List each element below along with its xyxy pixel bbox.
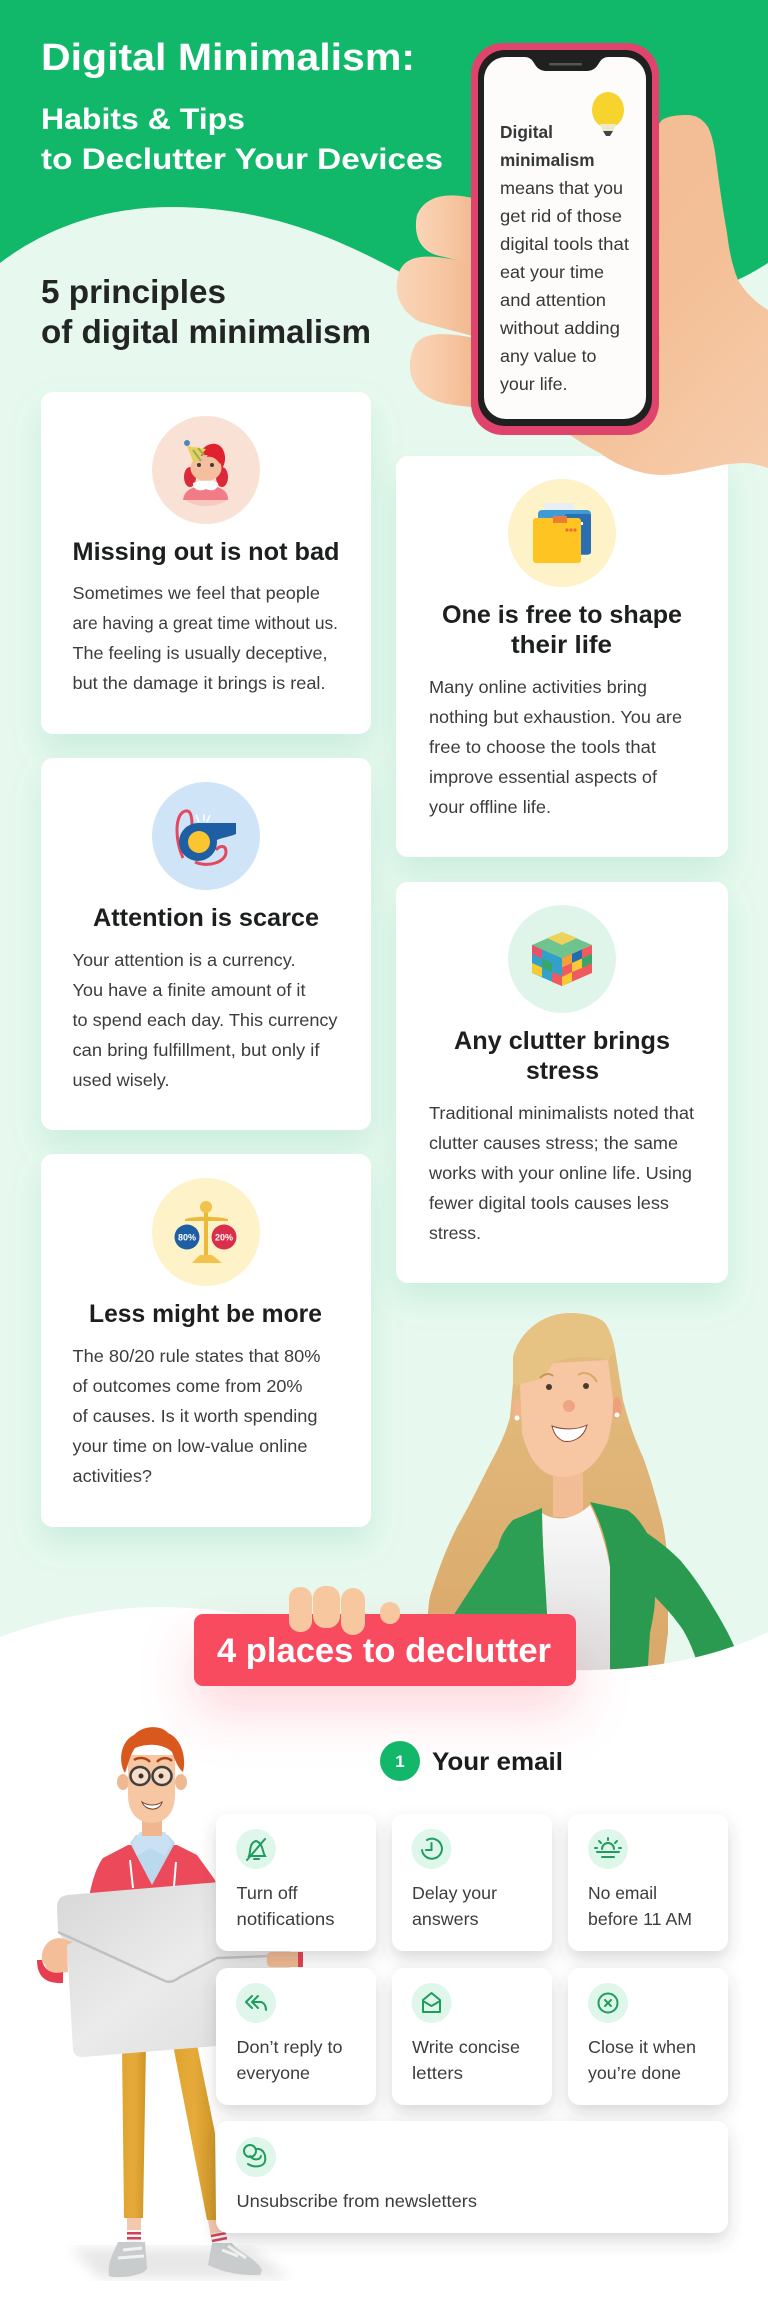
card: Attention is scarce	[41, 758, 371, 1130]
heading: Less might be more	[89, 1300, 322, 1328]
hands	[42, 1938, 73, 1974]
body text: are having a great time without us.	[72, 613, 338, 633]
label: Unsubscribe from newsletters	[236, 2191, 477, 2211]
hand	[397, 115, 768, 475]
title: Digital Minimalism:	[41, 37, 415, 79]
illustration: hand holding phone	[397, 43, 768, 475]
tip: no email before 11 AM	[568, 1814, 728, 1951]
body text: stress.	[429, 1223, 481, 1243]
label: Write concise	[412, 2037, 520, 2057]
body text: your time on low-value online	[72, 1436, 308, 1456]
heading: 5 principles	[41, 273, 371, 350]
phone text	[499, 122, 629, 394]
body text: your offline life.	[429, 797, 551, 817]
body text	[72, 583, 338, 693]
tip: don't reply to everyone	[216, 1968, 376, 2105]
sign: 4 places to declutter	[194, 1586, 576, 1686]
icon: clock	[412, 1829, 452, 1869]
step number: 1	[395, 1752, 405, 1771]
phone text: eat your time	[500, 262, 604, 282]
title: Habits & Tips	[41, 103, 245, 136]
background: white wave section	[0, 1607, 768, 2313]
body text: Sometimes we feel that people	[72, 583, 320, 603]
tip: turn off notifications	[216, 1814, 376, 1951]
icon: light bulb	[592, 92, 624, 136]
heading: 5 principles: 5 principles	[41, 273, 226, 310]
label: answers	[412, 1909, 479, 1929]
body text: used wisely.	[72, 1070, 170, 1090]
label: notifications	[236, 1909, 335, 1929]
title: to Declutter Your Devices	[41, 143, 443, 176]
tip: write concise letters	[392, 1968, 552, 2105]
body text: Many online activities bring	[429, 677, 647, 697]
heading: 5 principles: of digital minimalism	[41, 313, 371, 350]
phone	[471, 43, 659, 435]
phone text: minimalism	[500, 150, 594, 170]
heading	[454, 1027, 670, 1085]
heading: Missing out is not bad	[72, 538, 340, 566]
icon: 80/20 scale: 80%	[178, 1232, 196, 1242]
tip: unsubscribe from newsletters	[216, 2121, 728, 2233]
woman's fingers	[289, 1586, 400, 1635]
body text: of outcomes come from 20%	[72, 1376, 302, 1396]
body text	[72, 1346, 320, 1486]
label: Turn off	[236, 1883, 298, 1903]
body text: You have a finite amount of it	[72, 980, 306, 1000]
icon: 80/20 scale: 20%	[215, 1232, 233, 1242]
label	[236, 1883, 335, 1929]
illustration: man holding envelope	[37, 1727, 303, 2278]
icon: close circle	[588, 1983, 628, 2023]
body text: free to choose the tools that	[429, 737, 656, 757]
legs	[122, 2045, 146, 2218]
label	[412, 1883, 497, 1929]
body text	[72, 950, 338, 1090]
body text: Your attention is a currency.	[72, 950, 296, 970]
card: Any clutter brings stress	[396, 882, 728, 1283]
body text: The 80/20 rule states that 80%	[72, 1346, 320, 1366]
body text	[429, 677, 682, 817]
body text: works with your online life. Using	[428, 1163, 692, 1183]
head	[117, 1774, 129, 1790]
label	[412, 2037, 520, 2083]
icon: sunrise	[588, 1829, 628, 1869]
body text: to spend each day. This currency	[72, 1010, 338, 1030]
icon: folders	[508, 479, 616, 587]
body text: fewer digital tools causes less	[429, 1193, 669, 1213]
icon: party girl	[152, 416, 260, 524]
icon: 80/20 scale	[152, 1178, 260, 1286]
body text: nothing but exhaustion. You are	[429, 707, 682, 727]
background: green header	[0, 0, 768, 400]
title	[41, 37, 443, 176]
phone text: without adding	[499, 318, 620, 338]
heading text: Your email	[432, 1748, 563, 1776]
body text: Traditional minimalists noted that	[429, 1103, 694, 1123]
heading: One is free to shape	[442, 601, 682, 629]
heading: 4 places to declutter	[217, 1632, 551, 1670]
body text	[428, 1103, 694, 1243]
label: Close it when	[588, 2037, 696, 2057]
body text: clutter causes stress; the same	[429, 1133, 678, 1153]
label: No email	[588, 1883, 657, 1903]
icon: whistle	[152, 782, 260, 890]
card: Less might be more	[41, 1154, 371, 1527]
phone text: any value to	[500, 346, 596, 366]
label: Don’t reply to	[236, 2037, 342, 2057]
background: mint wave section	[0, 207, 768, 1700]
label: before 11 AM	[588, 1909, 692, 1929]
body text: improve essential aspects of	[429, 767, 657, 787]
label: everyone	[236, 2063, 310, 2083]
body text: of causes. Is it worth spending	[72, 1406, 318, 1426]
heading: Any clutter brings	[454, 1027, 670, 1055]
illustration: woman holding sign	[428, 1313, 735, 1680]
step number	[380, 1741, 420, 1781]
heading: stress	[526, 1057, 599, 1085]
label	[588, 1883, 692, 1929]
label: you’re done	[588, 2063, 681, 2083]
card: Missing out is not bad	[41, 392, 371, 734]
phone text: your life.	[500, 374, 568, 394]
tip: delay your answers	[392, 1814, 552, 1951]
label: letters	[412, 2063, 463, 2083]
body text: activities?	[72, 1466, 152, 1486]
body text: The feeling is usually deceptive,	[72, 643, 328, 663]
phone text: means that you	[500, 178, 623, 198]
icon: rubik's cube	[508, 905, 616, 1013]
heading	[442, 601, 682, 659]
body text: but the damage it brings is real.	[72, 673, 326, 693]
envelope	[57, 1876, 290, 2057]
tip: close it when you're done	[568, 1968, 728, 2105]
label	[236, 2037, 342, 2083]
heading: their life	[511, 631, 612, 659]
phone text: Digital	[500, 122, 553, 142]
heading: your email	[380, 1741, 563, 1781]
card: One is free to shape their life	[396, 456, 728, 857]
heading: Attention is scarce	[93, 904, 319, 932]
icon: open envelope	[412, 1983, 452, 2023]
icon: muted bell	[236, 1829, 276, 1869]
torso	[90, 1845, 220, 1900]
phone text: and attention	[500, 290, 606, 310]
label: Delay your	[412, 1883, 497, 1903]
body text: can bring fulfillment, but only if	[72, 1040, 320, 1060]
icon: unsubscribe	[236, 2137, 276, 2177]
icon: reply all	[236, 1983, 276, 2023]
label	[588, 2037, 696, 2083]
phone text: get rid of those	[500, 206, 622, 226]
phone text: digital tools that	[500, 234, 629, 254]
